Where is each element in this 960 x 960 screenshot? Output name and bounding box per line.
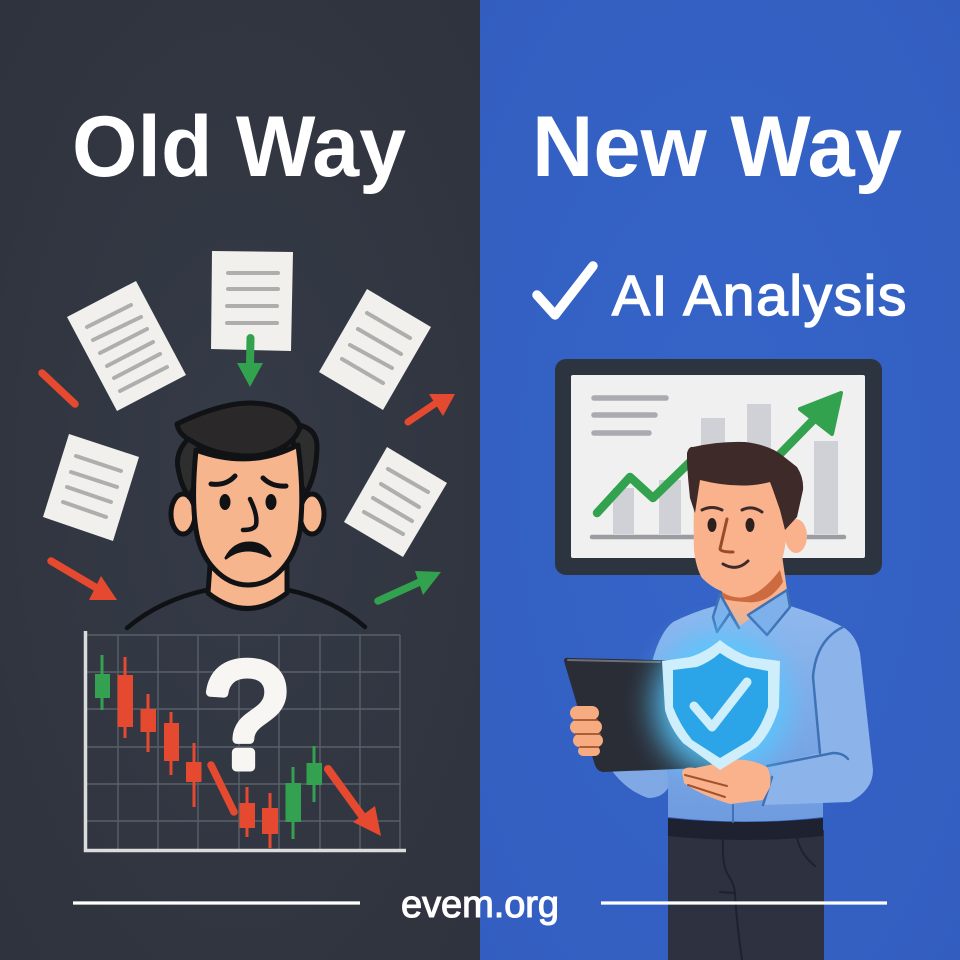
pants xyxy=(668,830,824,960)
ear xyxy=(785,519,807,553)
shield face xyxy=(673,653,768,758)
red candles xyxy=(118,657,278,848)
document: upper right xyxy=(319,289,431,410)
hair xyxy=(177,403,300,456)
smile xyxy=(723,561,748,567)
growth arrow xyxy=(597,393,841,513)
document: lower right xyxy=(344,447,447,557)
eyebrows xyxy=(211,476,286,486)
ear left xyxy=(171,494,195,534)
neck shadow xyxy=(722,570,783,602)
arrow: red upper right xyxy=(408,394,455,422)
divider line right xyxy=(601,901,887,905)
belt xyxy=(668,818,823,840)
eyebrows xyxy=(702,508,762,512)
brand: evem.org: evem.org xyxy=(401,884,559,926)
shield xyxy=(662,640,780,770)
monitor screen xyxy=(571,375,865,558)
ear right xyxy=(300,494,324,534)
panel: old way background xyxy=(0,0,480,960)
arrow: red dash upper left xyxy=(42,373,75,404)
icon: check mark xyxy=(537,266,593,315)
shield border xyxy=(662,640,780,770)
nose xyxy=(720,519,733,552)
divider line left xyxy=(73,901,360,905)
baseline xyxy=(592,535,844,539)
document: top xyxy=(211,251,293,351)
arrow: red lower left xyxy=(51,561,117,600)
shield check xyxy=(694,682,747,727)
document: lower left xyxy=(43,434,139,541)
face xyxy=(194,445,302,585)
documents: scattered papers xyxy=(43,251,447,557)
monitor frame xyxy=(555,359,882,575)
bars xyxy=(613,404,838,534)
neck xyxy=(722,555,787,626)
panel: new way background xyxy=(480,0,960,960)
figure: worried man xyxy=(127,403,365,628)
placket xyxy=(732,805,734,822)
subheading: AI Analysis: AI Analysis xyxy=(612,264,907,328)
heading: Old Way: Old Way xyxy=(72,99,406,195)
eyes xyxy=(220,494,276,510)
shield glow xyxy=(654,632,790,776)
right sleeve xyxy=(763,627,873,805)
chart axes xyxy=(86,631,406,850)
neck xyxy=(208,565,287,608)
sideburns xyxy=(178,425,317,497)
monitor xyxy=(555,359,882,575)
document: upper left xyxy=(67,281,186,411)
arrow: green down xyxy=(237,338,263,387)
mouth xyxy=(226,543,270,558)
left hand xyxy=(570,706,603,756)
question mark: ? xyxy=(204,631,288,799)
green candles xyxy=(95,655,322,839)
nose xyxy=(243,499,256,530)
chart: falling candlesticks xyxy=(85,631,406,850)
face xyxy=(694,470,788,594)
text lines xyxy=(594,398,666,433)
right hand xyxy=(682,760,771,804)
left hand finger lines xyxy=(575,720,600,747)
arrow: green lower right xyxy=(378,571,441,601)
chart red arrow xyxy=(328,769,381,836)
hair xyxy=(687,442,803,530)
left sleeve behind tablet xyxy=(610,740,668,798)
chart red slash xyxy=(211,765,234,812)
heading: New Way: New Way xyxy=(532,99,902,195)
chart grid xyxy=(85,635,400,850)
sleeve creases xyxy=(763,627,848,805)
collar xyxy=(713,590,790,635)
figure: confident man xyxy=(564,442,873,960)
shirt torso xyxy=(652,606,850,822)
shoulders xyxy=(127,590,365,628)
tablet xyxy=(564,658,725,772)
eyes xyxy=(708,518,754,532)
